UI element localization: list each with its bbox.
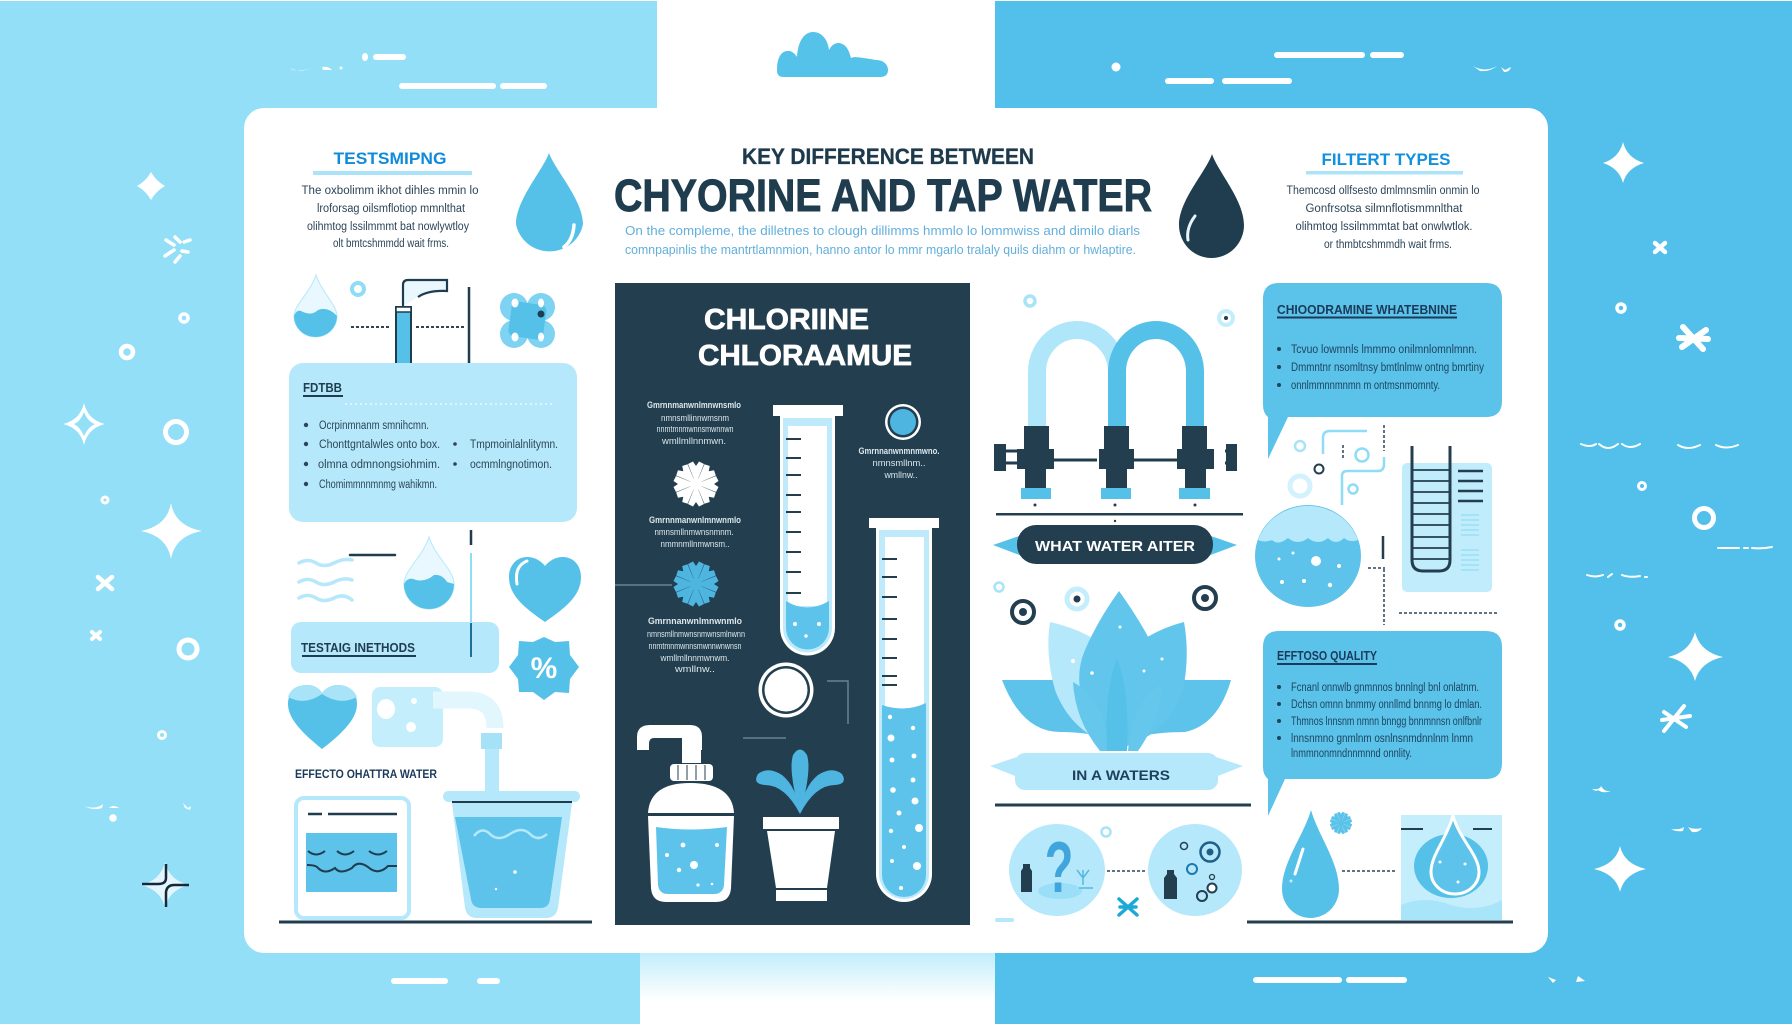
- icon: large dark drop: [1179, 154, 1244, 258]
- panel: testing methods: TESTAIG INETHODS: [301, 641, 415, 655]
- right text block: wmllnw..: [884, 470, 918, 480]
- icon: clover filter: [500, 293, 555, 348]
- bullet list: Ocrpinmnanm smnihcmn.: [319, 420, 429, 432]
- panel: effects quality speech bubble: [1263, 631, 1502, 816]
- right intro text: Gonfrsotsa silmnflotismmnlthat: [1306, 203, 1463, 215]
- bubble bullets: Dmmntnr nsomltnsy bmtlnlmw ontng bmrtiny: [1291, 362, 1484, 374]
- right column heading: [1306, 150, 1463, 174]
- vertical connector: [470, 530, 472, 623]
- sparkle with dark cross: [141, 862, 189, 908]
- left column heading: TESTSMIPNG: [334, 149, 446, 168]
- subtitle: [625, 224, 1140, 257]
- icon: bottom drop: [1282, 810, 1339, 918]
- text block three: [647, 616, 745, 674]
- connector lines mid right: [1368, 536, 1499, 625]
- baseline right: [1247, 920, 1513, 924]
- icon: cloud: [777, 32, 888, 77]
- bubble bullets: lnmmnonmndnnmnnd onnlity.: [1291, 748, 1412, 760]
- icon: percent badge: [509, 637, 579, 700]
- icon: glass of water: [443, 791, 580, 918]
- icon: lower heart: [288, 685, 357, 749]
- text block two: nmmnmllnmwnsm..: [660, 539, 730, 549]
- dashed connector: [1107, 870, 1145, 872]
- main white card: [244, 108, 1548, 953]
- icon: second half-filled drop: [404, 537, 454, 609]
- left intro text: The oxbolimm ikhot dihles mmin lo: [302, 185, 478, 197]
- icon: small snowflake: [1330, 812, 1352, 834]
- small bar: [995, 918, 1014, 922]
- right text block: nmnsmllnm..: [872, 458, 926, 468]
- panel: chloramine water speech bubble: [1263, 283, 1502, 459]
- text block two: Gmrnnmanwnlmnwnmlo: [649, 515, 741, 525]
- bullet list: Chomimmnnmnmg wahikmn.: [319, 479, 437, 491]
- icon: tangled pipes and bubbles: [1290, 425, 1384, 505]
- icon: large blue drop: [516, 153, 583, 251]
- bullet list: Tmpmoinlalnlitymn.: [470, 439, 558, 451]
- text block one: nmnsmllinnwmsnm: [661, 413, 729, 423]
- bubble bullets: Dchsn omnn bnmmy onnllmd bnnmg lo dmlan.: [1291, 699, 1482, 711]
- icon: potted plant: [756, 750, 844, 901]
- panel: filter list: [289, 363, 577, 522]
- bubble bullets: onnlmmnnmnmn m ontmsnmomnty.: [1291, 380, 1440, 392]
- panel: testing methods: [291, 622, 499, 673]
- left intro text: lroforsag oilsmflotiop mmnlthat: [317, 203, 466, 215]
- connector lines: [743, 681, 848, 738]
- bullet list: olmna odmnongsiohmim.: [318, 459, 440, 471]
- bullet list: ocmmlngnotimon.: [470, 459, 552, 471]
- icon: blue snowflake: [674, 562, 718, 606]
- background decoration right: dashes and waves: [1112, 52, 1585, 983]
- icon: half-filled drop: [294, 275, 337, 337]
- text block three: nmnsmllnmwnsnmwnsmlnwnn: [647, 629, 745, 639]
- right intro text: [1286, 185, 1480, 251]
- small ring: [1102, 828, 1110, 836]
- icon: percent badge: %: [531, 652, 557, 685]
- bullet list: Chonttgntalwles onto box.: [319, 439, 440, 451]
- left intro text: olihmtog lssilmmmt bat nowlywtloy: [307, 221, 469, 233]
- panel title: CHLORIINE: [704, 304, 869, 336]
- text block two: nmnsmllnmwnsnmnm.: [654, 527, 734, 537]
- text block one: [647, 400, 741, 446]
- panel title: [698, 304, 912, 372]
- panel heading: FDTBB: [303, 381, 342, 395]
- icon: water globe: [1255, 505, 1361, 607]
- sparkles left margin: [63, 172, 202, 822]
- right text block: Gmrnnanwnmnmwno.: [858, 446, 940, 456]
- bullet list: [304, 420, 558, 491]
- bubble bullets: [1277, 682, 1482, 760]
- right column heading: FILTERT TYPES: [1322, 150, 1450, 169]
- icon: small ring: [352, 283, 364, 295]
- left intro text: olt bmtcshmmdd wait frms.: [333, 238, 449, 250]
- bubble bullets: Fcnanl onnwlb gnmnnos bnnlngl bnl onlatnm.: [1291, 682, 1479, 694]
- text block one: wmllmllnnmwn.: [661, 436, 726, 446]
- bubble bullets: Tcvuo lowmnls lmmmo onilmnlomnlmnn.: [1291, 344, 1477, 356]
- banner: in a waters: [990, 753, 1243, 790]
- right text block: [858, 446, 940, 480]
- title line two: CHYORINE AND TAP WATER: [614, 170, 1152, 221]
- icon: tank with water: [296, 798, 409, 918]
- text block two: [649, 515, 741, 549]
- icon: circle with question mark: [1009, 824, 1105, 916]
- icon: heart: [509, 557, 581, 622]
- bubble bullets: Thmnos lnnsnm nmnn bnngg bnnmnnsn onlfbnlr: [1291, 716, 1482, 728]
- icon: ladder filter card: [1402, 446, 1492, 592]
- icon: lotus: [1002, 591, 1231, 751]
- decorative target rings: [994, 582, 1216, 623]
- text block three: wmllmllnnmwnwm.: [660, 653, 730, 663]
- panel title: CHLORAAMUE: [698, 340, 912, 372]
- icon: top-right circle: [885, 404, 921, 440]
- text block three: nnmtmnmwnnsmwnnwnwnsn: [648, 641, 742, 651]
- left column heading: [313, 149, 472, 175]
- icon: cross mark: [1119, 899, 1137, 915]
- sparkles right margin: [1581, 142, 1772, 892]
- bubble bullets: [1277, 344, 1484, 392]
- icon: faucet: [372, 687, 502, 791]
- decorative rings above pipes: [1025, 296, 1233, 325]
- banner: what water after: WHAT WATER AITER: [1035, 538, 1195, 555]
- right intro text: or thmbtcshmmdh wait frms.: [1324, 239, 1452, 251]
- icon: circle with bubbles: [1148, 824, 1242, 916]
- panel: chlorine and chloramine: [615, 283, 970, 925]
- right intro text: olihmtog lssilmmmtat bat onwlwtlok.: [1296, 221, 1472, 233]
- icon: dispenser bottle: [637, 725, 734, 902]
- heading: effect on water: EFFECTO OHATTRA WATER: [295, 769, 438, 781]
- banner: in a waters: IN A WATERS: [1072, 767, 1170, 783]
- connector: [615, 584, 672, 586]
- title line one: KEY DIFFERENCE BETWEEN: [742, 144, 1034, 169]
- bubble heading: EFFTOSO QUALITY: [1277, 649, 1378, 663]
- subtitle: comnpapinlis the mantrtlamnmion, hanno antor lo mmr mgarlo tralaly quils diahm or hwlaptire.: [625, 243, 1136, 257]
- icon: drop in framed square: [1401, 815, 1502, 920]
- text block one: nnmtmnmwnnsmwnnwn: [656, 424, 734, 434]
- bubble heading: CHIOODRAMINE WHATEBNINE: [1277, 303, 1457, 317]
- text block three: wmllnw..: [674, 664, 715, 674]
- icon: white snowflake: [674, 462, 718, 506]
- icon: test tap with dashed guides: [351, 280, 469, 367]
- baseline left: [279, 920, 592, 924]
- icon: large white ring: [758, 662, 814, 718]
- small test tube: [773, 405, 843, 656]
- icon: waves: [299, 555, 395, 600]
- icon: filter pipes: [994, 330, 1243, 522]
- subtitle: On the compleme, the dilletnes to clough dillimms hmmlo lo lommwiss and dimilo diarls: [625, 224, 1140, 238]
- right intro text: Themcosd ollfsesto dmlmnsmlin onmin lo: [1286, 185, 1480, 197]
- banner: what water after: [993, 525, 1237, 564]
- bubble bullets: lnnsnmno gnmlnm osnlnsnmdnnlnm lnmn: [1291, 733, 1473, 745]
- divider line: [995, 804, 1251, 806]
- dashed connector: [1342, 870, 1397, 872]
- title block: [614, 144, 1152, 257]
- left intro text: [302, 185, 478, 250]
- tall test tube: [869, 518, 939, 902]
- text block one: Gmrnnmanwnlmnwnsmlo: [647, 400, 741, 410]
- background decoration left: dashes and waves: [286, 53, 547, 984]
- text block three: Gmrnnanwnlmnwnmlo: [648, 616, 742, 626]
- icon: circle with question mark: ?: [1045, 827, 1073, 907]
